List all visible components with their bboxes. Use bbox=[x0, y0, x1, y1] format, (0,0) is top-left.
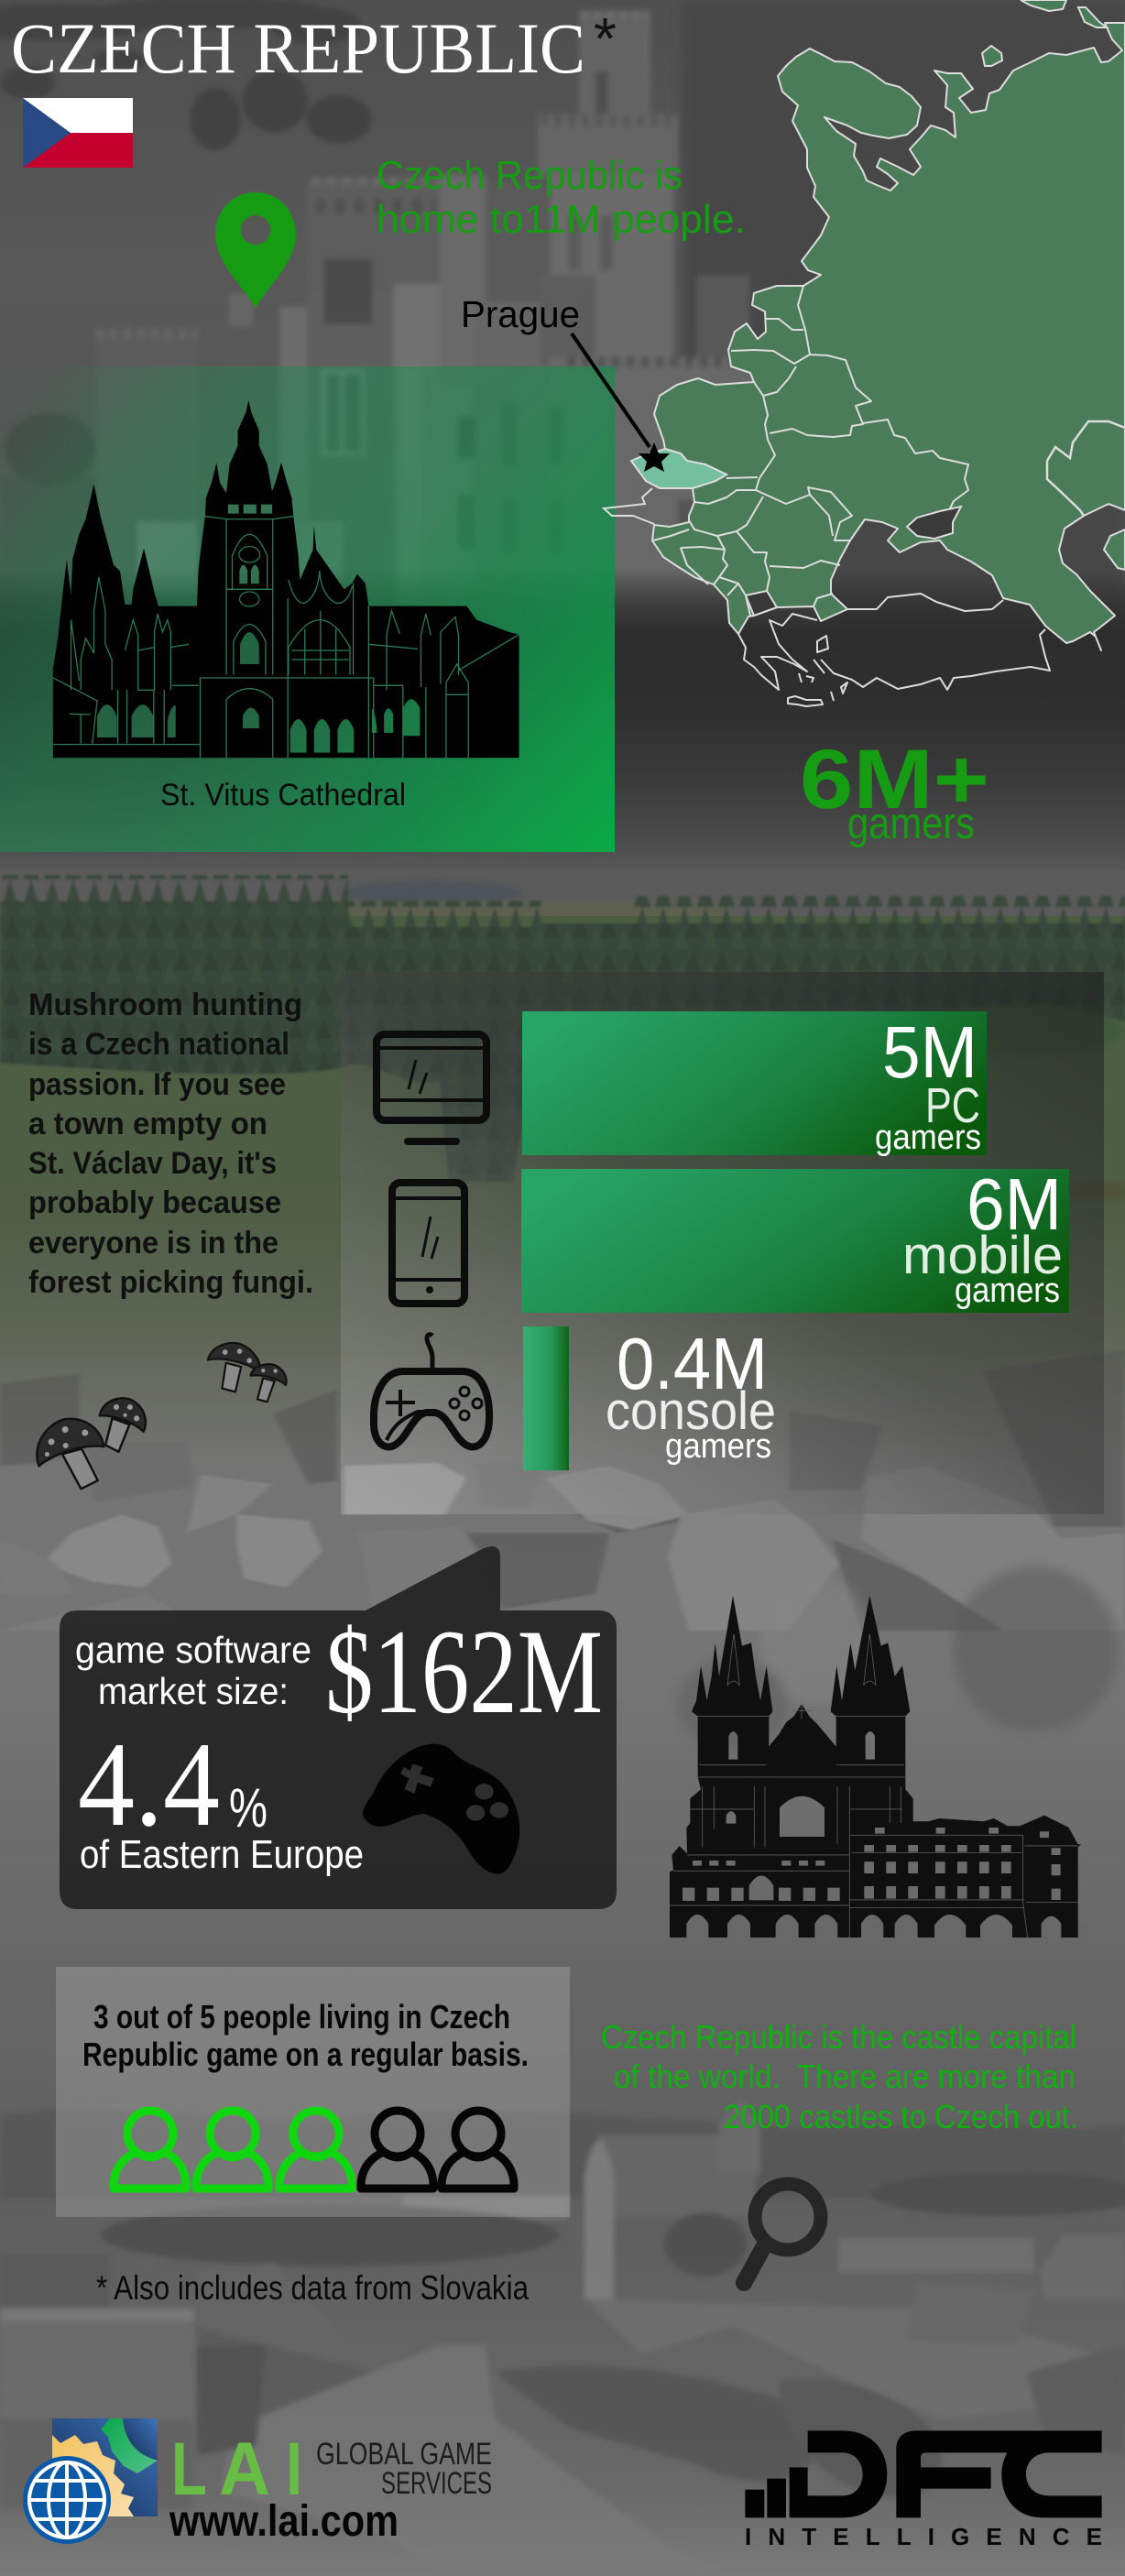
LAI letters: A bbox=[219, 2428, 270, 2511]
mushroom hunting text block bbox=[28, 988, 313, 1300]
icon: Czech flag bbox=[23, 98, 133, 168]
icon: globe bbox=[25, 2458, 109, 2542]
gamer total stat: 6M+ bbox=[800, 733, 989, 826]
icon: location pin bbox=[215, 192, 296, 308]
icon: PC monitor bbox=[377, 1034, 486, 1145]
icon: five people, three highlighted bbox=[114, 2111, 514, 2189]
population text: Czech Republic is bbox=[377, 153, 683, 198]
website: www.lai.com bbox=[169, 2497, 399, 2546]
icon: gears bbox=[52, 2418, 158, 2516]
market size label bbox=[75, 1629, 311, 1712]
panel: regular gamers bbox=[56, 1967, 570, 2217]
bar: mobile gamers: gamers bbox=[955, 1272, 1060, 1310]
icon: smartphone bbox=[392, 1183, 464, 1304]
bar: console gamers: 0.4M bbox=[617, 1323, 768, 1404]
share of Eastern Europe: 4.4 bbox=[78, 1717, 220, 1851]
share of Eastern Europe: % bbox=[229, 1777, 268, 1839]
bar: console gamers: gamers bbox=[665, 1427, 771, 1466]
market size value: $162M bbox=[325, 1604, 603, 1739]
bar: mobile gamers bbox=[521, 1163, 1069, 1313]
mushroom hunting text block: everyone is in the bbox=[28, 1226, 279, 1261]
castle capital text: 2000 castles to Czech out. bbox=[724, 2098, 1078, 2135]
town shapes bbox=[0, 2098, 1125, 2576]
population text: home to11M people. bbox=[377, 197, 746, 242]
LAI letters bbox=[171, 2428, 302, 2511]
icon: Tyn Church silhouette bbox=[670, 1596, 1081, 1937]
share of Eastern Europe bbox=[78, 1717, 364, 1877]
arrow line to Prague bbox=[572, 333, 650, 447]
green gradient panel behind cathedral bbox=[0, 366, 615, 852]
bar: mobile gamers: mobile bbox=[902, 1226, 1063, 1285]
map of Eastern Europe bbox=[604, 0, 1125, 706]
market size label: market size: bbox=[98, 1670, 289, 1712]
logo: LAI Global Game Services bbox=[25, 2418, 492, 2546]
panel: gamer platforms bbox=[341, 972, 1104, 1514]
bar: PC gamers: gamers bbox=[875, 1119, 981, 1157]
cathedral caption: St. Vitus Cathedral bbox=[160, 778, 406, 813]
share of Eastern Europe: of Eastern Europe bbox=[80, 1832, 364, 1877]
icon: console controller bbox=[374, 1335, 489, 1446]
mushroom hunting text block: Mushroom hunting bbox=[28, 988, 302, 1022]
bar: PC gamers: 5M bbox=[882, 1011, 978, 1093]
services tagline: SERVICES bbox=[381, 2466, 492, 2501]
mushroom hunting text block: a town empty on bbox=[28, 1107, 268, 1141]
bar: PC gamers bbox=[522, 1011, 987, 1157]
mushroom hunting text block: probably because bbox=[28, 1185, 281, 1220]
Prague label: Prague bbox=[461, 293, 580, 335]
icon: Prague star bbox=[639, 442, 670, 472]
footnote: * Also includes data from Slovakia bbox=[96, 2269, 529, 2307]
castle capital text: of the world. There are more than bbox=[614, 2058, 1076, 2095]
title asterisk: * bbox=[594, 5, 617, 71]
mushroom hunting text block: passion. If you see bbox=[28, 1067, 286, 1102]
bar: mobile gamers: 6M bbox=[967, 1163, 1062, 1245]
3 out of 5 text: Republic game on a regular basis. bbox=[82, 2036, 529, 2073]
icon: game controller bbox=[363, 1744, 519, 1874]
mushroom hunting text block: is a Czech national bbox=[28, 1027, 289, 1062]
castle capital text bbox=[601, 2018, 1078, 2135]
dancers shapes, in stretched coordinates bbox=[0, 1349, 1125, 1631]
gamer total stat: gamers bbox=[847, 800, 975, 848]
castle capital text: Czech Republic is the castle capital bbox=[601, 2018, 1076, 2056]
logo: DFC Intelligence bbox=[745, 2430, 1102, 2550]
icon: mushrooms small bbox=[202, 1337, 290, 1405]
icon: magnifying glass bbox=[744, 2184, 821, 2283]
3 out of 5 text: 3 out of 5 people living in Czech bbox=[93, 1998, 510, 2036]
mushroom hunting text block: forest picking fungi. bbox=[28, 1265, 313, 1300]
LAI letters: I bbox=[286, 2428, 302, 2511]
3 out of 5 text bbox=[82, 1998, 529, 2073]
services tagline: GLOBAL GAME bbox=[316, 2437, 492, 2472]
mushroom hunting text block: St. Václav Day, it's bbox=[28, 1146, 277, 1181]
bar: console gamers: console bbox=[606, 1381, 776, 1441]
population text bbox=[377, 153, 746, 242]
Czech Republic highlight bbox=[631, 449, 726, 488]
market size label: game software bbox=[75, 1629, 311, 1671]
icon: mushrooms large bbox=[28, 1392, 152, 1498]
bar: console gamers bbox=[523, 1323, 776, 1470]
LAI letters: L bbox=[171, 2428, 207, 2511]
title: CZECH REPUBLIC bbox=[11, 8, 585, 88]
icon: St. Vitus Cathedral silhouette bbox=[53, 400, 519, 758]
panel: market size bbox=[60, 1546, 617, 1909]
bar: PC gamers: PC bbox=[925, 1078, 980, 1133]
services tagline bbox=[316, 2437, 492, 2501]
logo: DFC Intelligence: INTELLIGENCE bbox=[745, 2523, 1102, 2550]
